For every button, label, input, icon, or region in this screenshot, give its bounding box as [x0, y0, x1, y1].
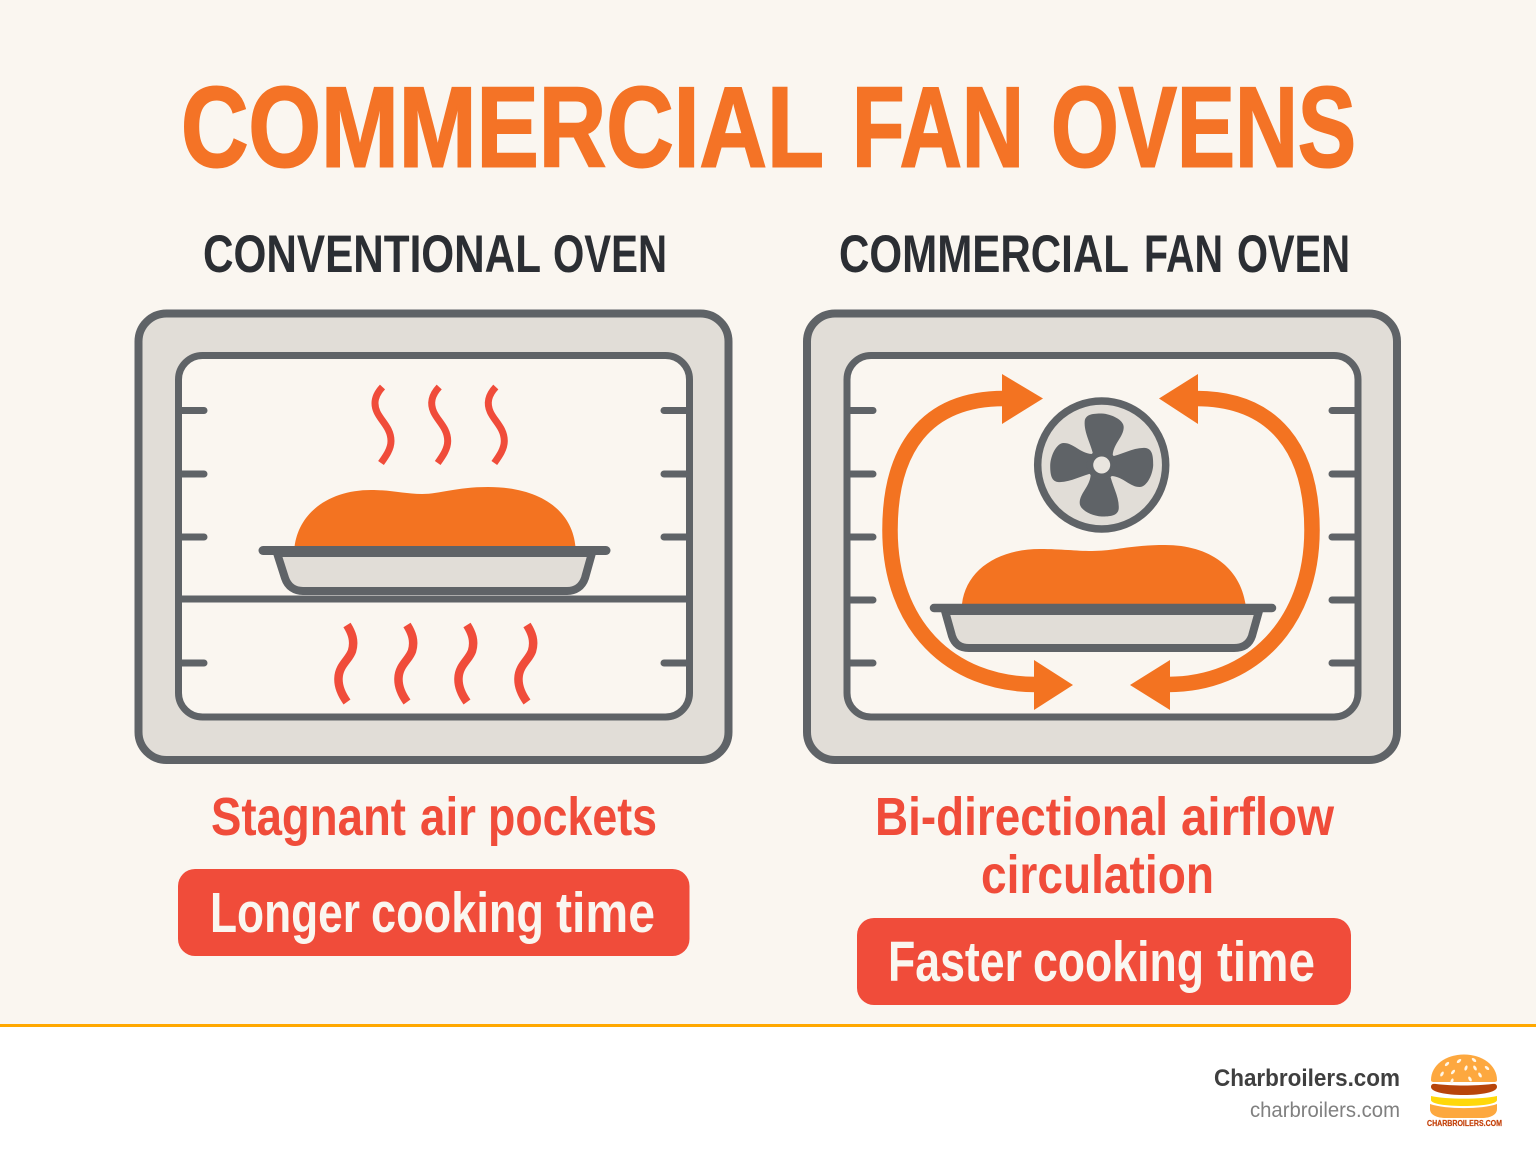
title: COMMERCIAL [181, 64, 824, 192]
upper heat waves [375, 387, 504, 463]
oven outer frame [807, 314, 1397, 760]
caption: stagnant air pockets: Stagnant [211, 787, 406, 847]
arrow: lower left [890, 530, 1073, 710]
caption: stagnant air pockets: air [420, 787, 476, 847]
badge: faster cooking time [857, 918, 1351, 1005]
rack rails [181, 410, 687, 663]
caption: bi-directional airflow circulation [875, 787, 1335, 905]
arrow: lower right [1130, 530, 1312, 710]
brand name: Charbroilers.com [1214, 1065, 1400, 1092]
badge: faster cooking time: time [1217, 930, 1315, 994]
icon: burger logo: CHARBROILERS.COM [1427, 1119, 1502, 1128]
oven cavity [178, 356, 690, 717]
title: FAN [852, 64, 1024, 192]
caption: stagnant air pockets [211, 787, 657, 847]
food dome [962, 545, 1246, 604]
badge: longer cooking time [178, 869, 690, 956]
title: OVENS [1051, 64, 1356, 192]
baking pan [263, 550, 606, 591]
heading: commercial fan oven: COMMERCIAL [839, 225, 1129, 284]
badge: faster cooking time: cooking [1033, 930, 1204, 994]
caption: bi-directional airflow circulation: airflow [1181, 787, 1335, 847]
baking pan [934, 608, 1272, 648]
airflow arrows [890, 374, 1312, 710]
badge: longer cooking time: time [556, 881, 655, 945]
rack rails [849, 410, 1356, 663]
heading: conventional oven: OVEN [553, 225, 667, 284]
title [181, 64, 1356, 192]
oven outer frame [138, 314, 728, 760]
icon: fan [1038, 401, 1166, 529]
heading: commercial fan oven: OVEN [1237, 225, 1350, 284]
heading: commercial fan oven: FAN [1144, 225, 1223, 284]
brand url: charbroilers.com [1250, 1099, 1400, 1122]
arrow: upper right [1159, 374, 1312, 530]
footer [0, 1024, 1536, 1154]
heading: conventional oven: CONVENTIONAL [203, 225, 541, 284]
panel: commercial fan oven diagram [807, 314, 1397, 760]
oven cavity [847, 356, 1358, 717]
badge: longer cooking time: Longer [210, 881, 360, 945]
arrow: upper left [890, 374, 1043, 530]
panel: conventional oven diagram [138, 314, 728, 760]
caption: bi-directional airflow circulation: circulation [981, 845, 1214, 905]
caption: stagnant air pockets: pockets [488, 787, 657, 847]
badge: longer cooking time: cooking [371, 881, 544, 945]
icon: burger logo [1427, 1054, 1502, 1128]
lower heat waves [338, 625, 533, 702]
badge: faster cooking time: Faster [888, 930, 1022, 994]
food dome [294, 487, 576, 547]
caption: bi-directional airflow circulation: Bi-directional [875, 787, 1168, 847]
